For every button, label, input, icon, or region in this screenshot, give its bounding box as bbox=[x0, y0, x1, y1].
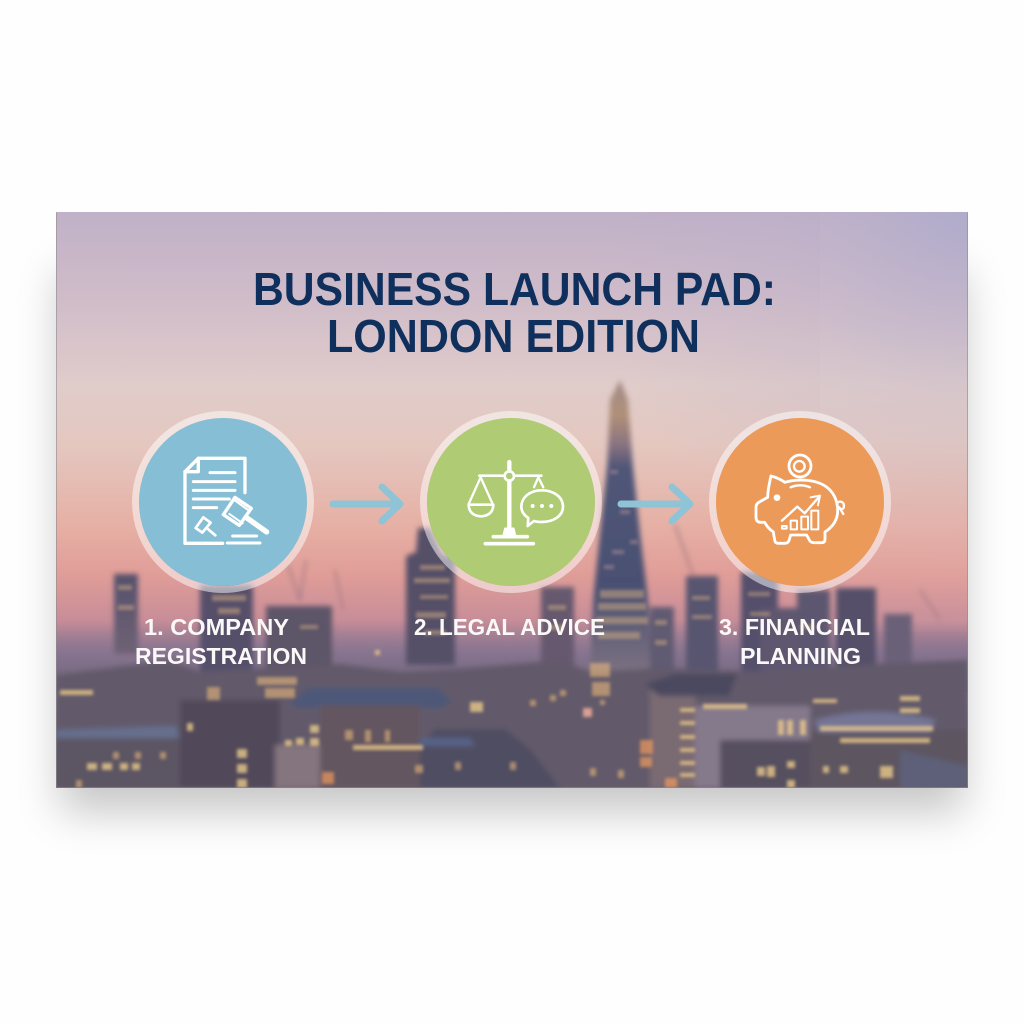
circle badge: green bbox=[424, 414, 598, 590]
label: step 2: 2. LEGAL ADVICE bbox=[414, 614, 605, 640]
title bbox=[253, 263, 776, 362]
panel edge bbox=[56, 212, 968, 788]
arrow: step 2 to step 3 bbox=[621, 487, 690, 521]
title: BUSINESS LAUNCH PAD: bbox=[253, 263, 776, 315]
icon: document and gavel bbox=[185, 458, 267, 543]
label: step 3: 3. FINANCIAL bbox=[719, 614, 870, 640]
circle badge: orange bbox=[712, 414, 888, 590]
step 3: financial planning bbox=[712, 414, 888, 669]
icon: scales and speech bubble bbox=[469, 462, 563, 544]
step 2: legal advice bbox=[414, 414, 605, 640]
circle badge: blue bbox=[136, 414, 310, 590]
title: LONDON EDITION bbox=[327, 310, 700, 362]
step 1: company registration bbox=[135, 414, 310, 669]
label: step 3 bbox=[719, 614, 870, 669]
panel drop shadow bbox=[66, 260, 958, 788]
label: step 1: 1. COMPANY bbox=[144, 614, 289, 640]
arrow: step 1 to step 2 bbox=[333, 487, 400, 521]
label: step 1 bbox=[135, 614, 307, 669]
label: step 1: REGISTRATION bbox=[135, 643, 307, 669]
icon: piggy bank with growth chart bbox=[756, 455, 844, 543]
city windows bbox=[60, 470, 933, 788]
panel: blurred London skyline background bbox=[56, 212, 968, 788]
label: step 3: PLANNING bbox=[740, 643, 861, 669]
